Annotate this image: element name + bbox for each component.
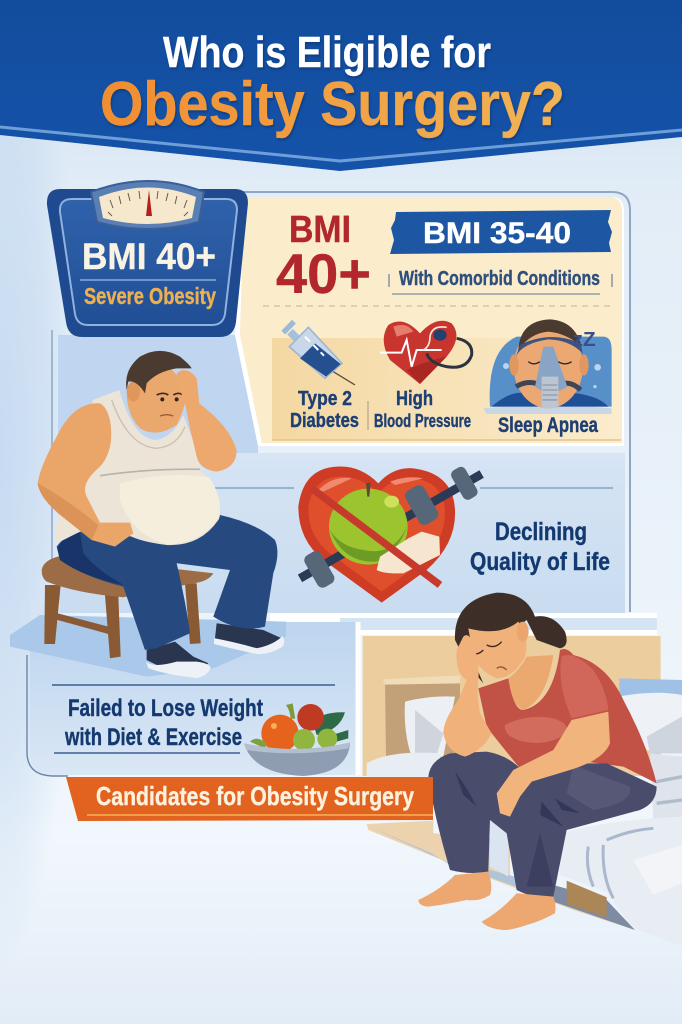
text: type 2 diabetes: Type 2 — [298, 388, 352, 410]
text: type 2 diabetes — [290, 388, 359, 432]
scale: BMI 40+ severe obesity — [47, 181, 248, 337]
icon: heart with apple and dumbbell — [298, 465, 482, 603]
hair — [455, 593, 567, 683]
headboard — [383, 675, 460, 757]
pants — [428, 752, 657, 897]
icon: sleep apnea man — [483, 319, 612, 414]
bedroom scene — [363, 636, 682, 947]
pants — [57, 515, 277, 650]
text: severe obesity: Severe Obesity — [84, 283, 216, 309]
title: Who is Eligible for — [163, 28, 491, 77]
icon: heart with stethoscope — [380, 321, 472, 384]
text: failed to lose weight: with Diet & Exercise — [64, 724, 242, 751]
banner: candidates for obesity surgery: Candidates for Obesity Surgery — [96, 781, 414, 811]
skin chest and face — [507, 655, 553, 710]
text: z z: zZ — [573, 328, 596, 351]
shoes — [147, 642, 208, 673]
bed frame — [367, 821, 635, 930]
text: sleep apnea: Sleep Apnea — [498, 414, 598, 437]
arms — [443, 635, 492, 757]
text: high blood pressure — [374, 388, 471, 431]
text: BMI 40+ red: BMI — [289, 209, 351, 251]
icon: syringe — [283, 322, 355, 385]
header banner — [0, 0, 682, 171]
text: BMI 40+: BMI 40+ — [82, 236, 216, 277]
right arm — [177, 370, 237, 472]
illustration: seated man on stool — [10, 351, 286, 678]
text: high blood pressure: High — [396, 388, 433, 410]
text: failed to lose weight: Failed to Lose Weight — [68, 695, 263, 722]
text: failed to lose weight — [64, 695, 263, 751]
text: declining quality of life — [470, 518, 610, 576]
head — [126, 351, 192, 433]
left pillow — [405, 696, 455, 757]
right pillow — [622, 693, 682, 757]
title: Obesity Surgery? — [100, 70, 565, 139]
left arm and hand — [38, 403, 133, 547]
text: type 2 diabetes: Diabetes — [290, 410, 359, 432]
icon: fruit bowl — [244, 703, 350, 776]
banner: BMI 35-40: BMI 35-40 — [423, 217, 571, 250]
text: declining quality of life: Declining — [495, 518, 587, 546]
text: high blood pressure: Blood Pressure — [374, 411, 471, 431]
scale dial — [91, 181, 204, 229]
illustration: woman seated on bed — [418, 593, 657, 930]
text: with comorbid conditions: With Comorbid Conditions — [399, 268, 600, 290]
feet — [418, 872, 556, 930]
panel: comorbid conditions — [272, 319, 621, 440]
main panel backgrounds — [30, 192, 657, 635]
stool — [42, 556, 213, 658]
banner: candidates for obesity surgery — [66, 777, 433, 821]
panel: bottom-left failed diet — [27, 622, 358, 776]
banner: BMI 35-40 — [390, 210, 612, 254]
red shirt — [478, 649, 657, 783]
mattress — [560, 817, 682, 947]
text: BMI 40+ red — [276, 209, 371, 305]
title — [100, 28, 565, 139]
body tank top — [55, 390, 220, 545]
text: BMI 40+ red: 40+ — [276, 242, 371, 305]
text: declining quality of life: Quality of Life — [470, 548, 610, 576]
